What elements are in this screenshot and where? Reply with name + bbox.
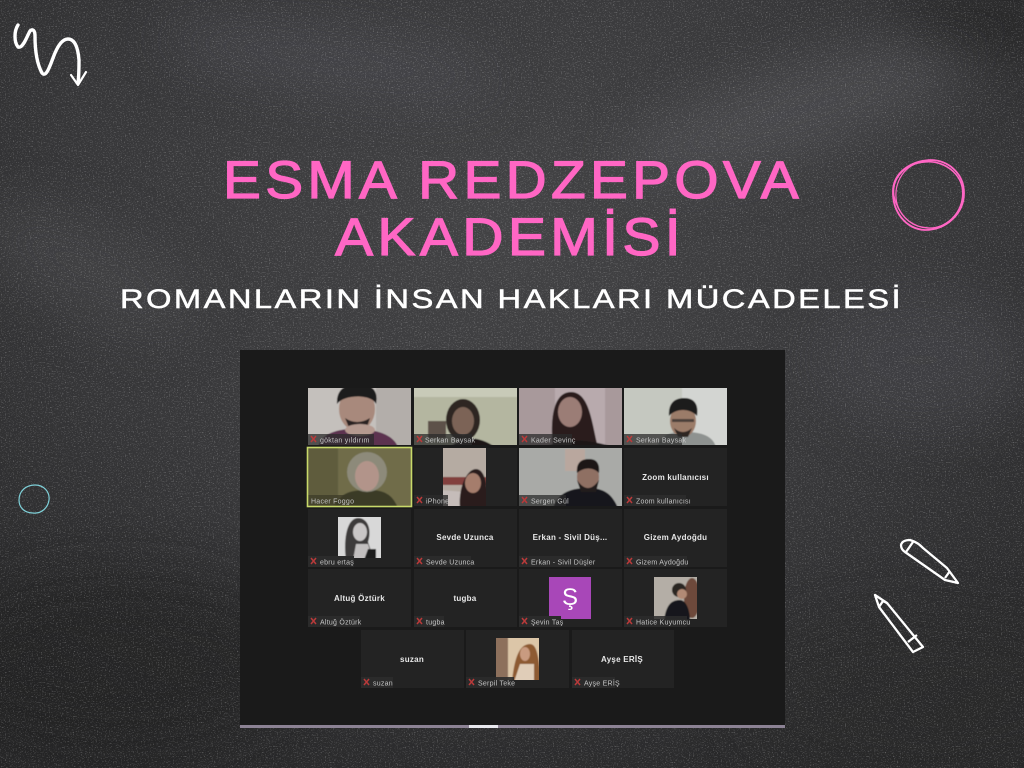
participant: Serkan Baysak: Serkan Baysak xyxy=(636,438,687,444)
participant: Serkan Baysak: Serkan Baysak xyxy=(425,438,476,444)
participant: göktan yıldırım xyxy=(308,388,411,445)
participant: ebru ertaş xyxy=(308,509,411,567)
title: ESMA REDZEPOVA xyxy=(223,151,803,210)
participant: Şevin Taş: Ş xyxy=(562,584,578,611)
participant: Sevde Uzunca: Sevde Uzunca xyxy=(426,560,475,566)
participant: Altuğ Öztürk: Altuğ Öztürk xyxy=(320,618,362,626)
icon: small teal circle xyxy=(19,485,49,513)
participant: Erkan - Sivil Düşler: Erkan - Sivil Düşler xyxy=(531,560,596,566)
participant: Ayşe ERİŞ xyxy=(572,630,674,688)
participant: göktan yıldırım: göktan yıldırım xyxy=(320,438,370,444)
participant: iPhone: iPhone xyxy=(426,498,449,506)
participant: Şevin Taş xyxy=(519,569,622,627)
participant: Gizem Aydoğdu: Gizem Aydoğdu xyxy=(636,560,689,566)
participant: Sevde Uzunca xyxy=(414,509,517,567)
participant: Erkan - Sivil Düşler: Erkan - Sivil Düş... xyxy=(533,533,607,542)
participant: suzan xyxy=(361,630,464,688)
participant: Hacer Foggo (active speaker) xyxy=(306,446,413,508)
participant: tugba: tugba xyxy=(426,620,445,626)
participant: Altuğ Öztürk xyxy=(308,569,411,627)
participant: Sergen Gül xyxy=(517,446,624,508)
title: AKADEMİSİ xyxy=(335,208,685,267)
icon: pen xyxy=(901,540,958,583)
participant: ebru ertaş: ebru ertaş xyxy=(320,560,354,566)
subtitle: ROMANLARIN İNSAN HAKLARI MÜCADELESİ xyxy=(120,283,903,314)
participant: Serpil Teke: Serpil Teke xyxy=(478,680,515,688)
participant: Gizem Aydoğdu: Gizem Aydoğdu xyxy=(644,533,707,542)
title xyxy=(223,151,803,267)
participant: Serkan Baysak xyxy=(414,388,517,445)
participant: Kader Sevinç xyxy=(519,388,622,445)
participant: tugba: tugba xyxy=(453,594,477,603)
participant: Serpil Teke xyxy=(466,630,569,688)
participant: Serkan Baysak xyxy=(624,388,727,445)
participant: Gizem Aydoğdu xyxy=(624,509,727,567)
participant: suzan: suzan xyxy=(373,680,393,688)
participant: tugba xyxy=(414,569,517,627)
participant: Zoom kullanıcısı: Zoom kullanıcısı xyxy=(642,473,709,482)
participant: Sergen Gül: Sergen Gül xyxy=(531,498,569,506)
participant: Ayşe ERİŞ: Ayşe ERİŞ xyxy=(584,678,620,688)
icon: pencil xyxy=(875,595,923,652)
participant: Ayşe ERİŞ: Ayşe ERİŞ xyxy=(601,655,643,664)
participant: Hatice Kuyumcu: Hatice Kuyumcu xyxy=(636,620,690,626)
participant: iPhone xyxy=(414,446,517,508)
zoom screenshot panel xyxy=(240,350,785,728)
participant: Şevin Taş: Şevin Taş xyxy=(531,620,564,626)
icon: squiggle arrow xyxy=(15,25,86,85)
participant: suzan: suzan xyxy=(400,655,424,664)
participant: Kader Sevinç: Kader Sevinç xyxy=(531,438,576,444)
icon: pink hand-drawn circle xyxy=(893,160,964,230)
participant: Zoom kullanıcısı: Zoom kullanıcısı xyxy=(636,498,691,506)
muted microphone icons xyxy=(311,436,632,685)
participant: Altuğ Öztürk: Altuğ Öztürk xyxy=(334,594,385,603)
participant: Sevde Uzunca: Sevde Uzunca xyxy=(436,533,494,542)
participant: Hacer Foggo (active speaker): Hacer Foggo xyxy=(311,498,354,506)
participant: Erkan - Sivil Düşler xyxy=(519,509,622,567)
participant: Zoom kullanıcısı xyxy=(624,448,727,506)
participant: Hatice Kuyumcu xyxy=(624,569,727,627)
